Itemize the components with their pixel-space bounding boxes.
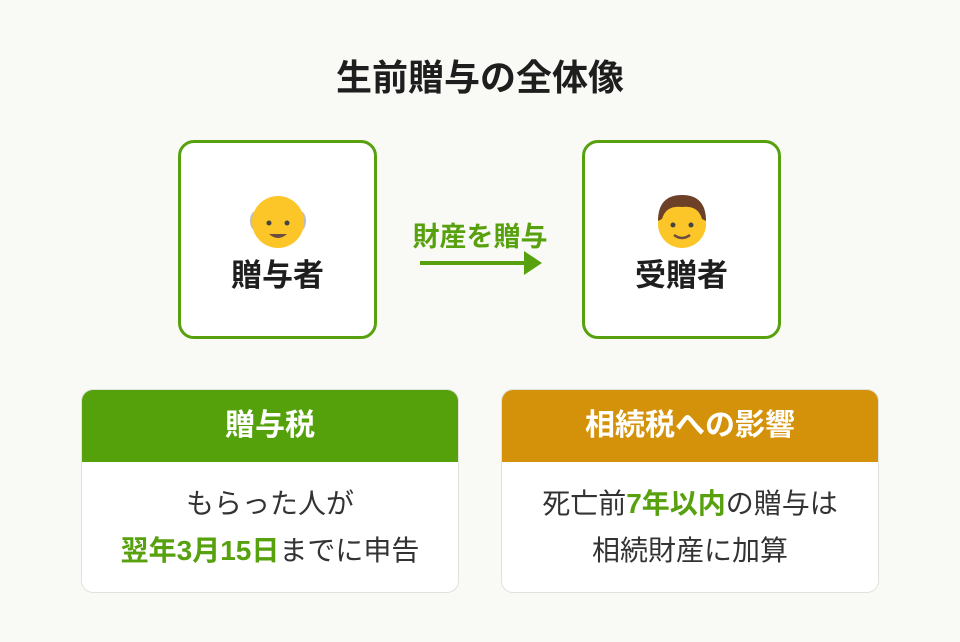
icon: boy [658,195,706,248]
card header: 相続税への影響 [585,409,795,442]
label: 贈与者: 贈与者 [231,258,324,293]
title: 生前贈与の全体像 [336,57,624,98]
panel: giver [178,140,377,339]
label: 受贈者: 受贈者 [635,258,728,293]
card: gift tax [81,389,459,593]
card: inheritance tax impact [501,389,879,593]
card header [502,390,878,462]
arrow label: 財産を贈与 [412,222,548,252]
card body: もらった人が [186,488,354,519]
card body [121,488,419,566]
card body [542,488,838,566]
card header: 贈与税 [225,409,315,442]
card body: 相続財産に加算 [592,535,788,566]
arrow [420,251,542,275]
card body: 翌年3月15日までに申告 [121,535,419,566]
panel: receiver [582,140,781,339]
icon: old man [250,196,306,248]
card body: 死亡前7年以内の贈与は [542,488,838,519]
card header [82,390,458,462]
